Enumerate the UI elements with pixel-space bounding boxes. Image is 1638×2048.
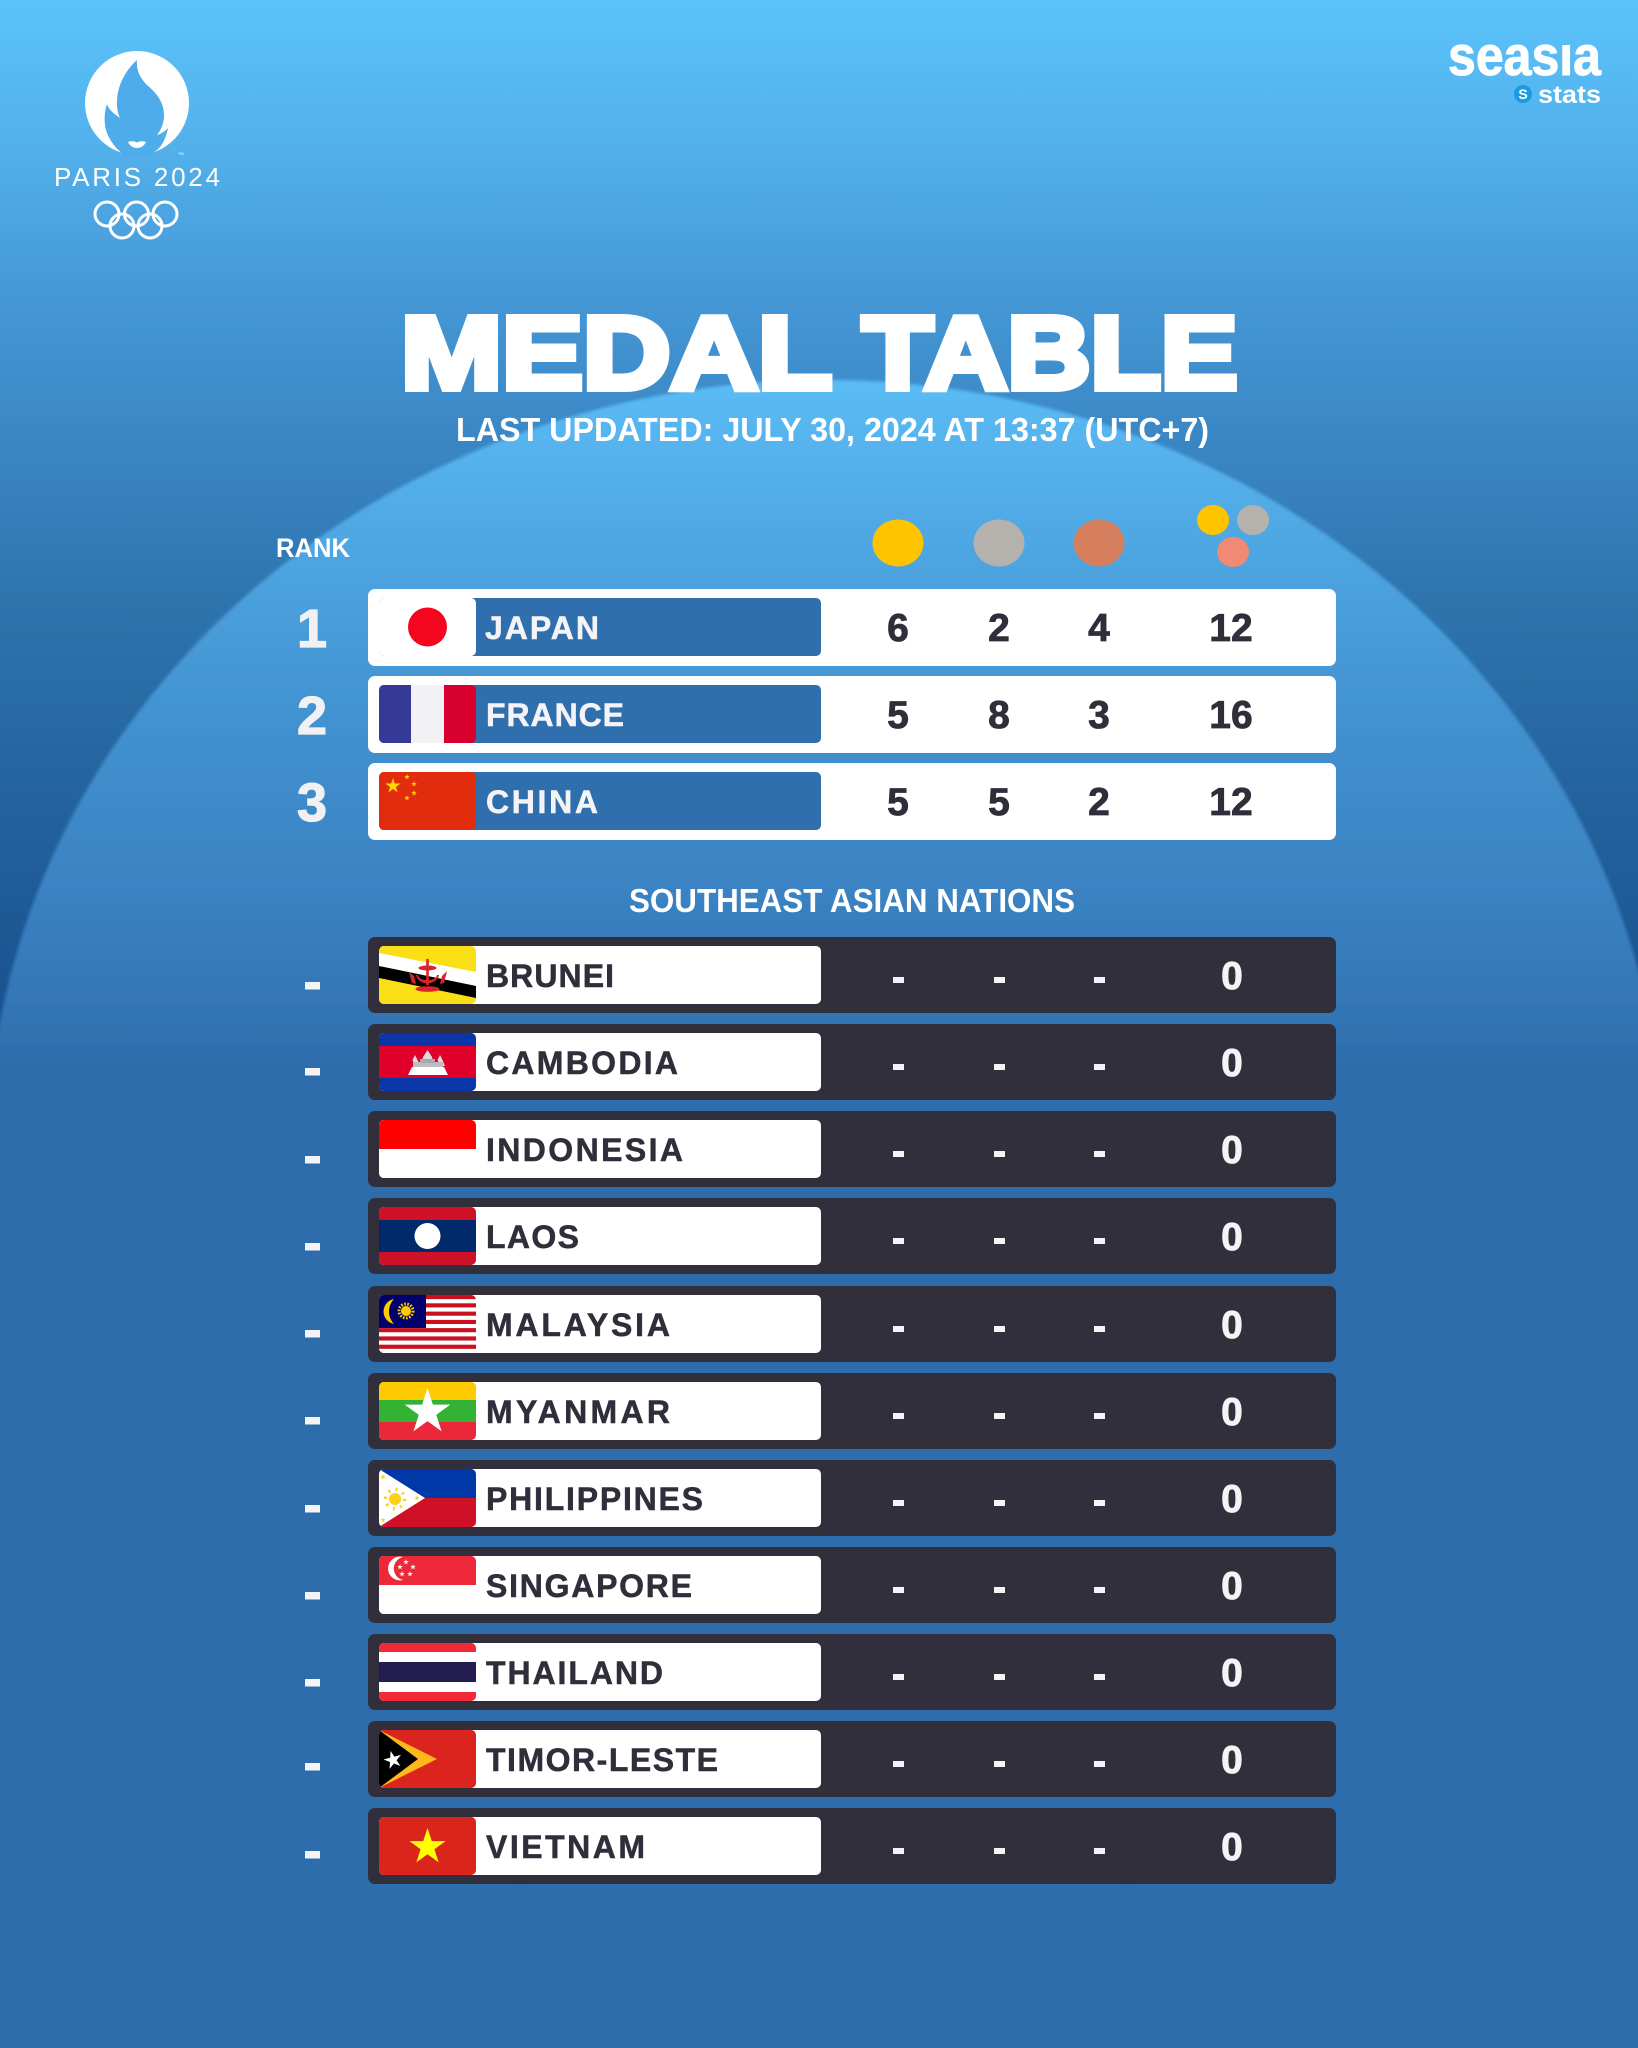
row: Thailand: THAILAND xyxy=(486,1655,663,1691)
logo: seasia stats: stats xyxy=(1538,81,1601,109)
row: China: CHINA xyxy=(486,784,598,820)
row: Myanmar: MYANMAR xyxy=(486,1394,670,1430)
row: France xyxy=(297,676,1336,753)
row: Brunei xyxy=(305,937,1336,1013)
row: Malaysia: 0 xyxy=(1221,1304,1243,1347)
row: Philippines xyxy=(305,1460,1336,1536)
icon: total medals xyxy=(1197,505,1269,567)
row: Singapore xyxy=(305,1547,1336,1623)
logo: seasia stats xyxy=(1449,44,1602,103)
row: France: 3 xyxy=(1088,694,1110,737)
row: Vietnam: 0 xyxy=(1221,1826,1243,1869)
row: Singapore: SINGAPORE xyxy=(486,1568,692,1604)
row: Cambodia: 0 xyxy=(1221,1042,1243,1085)
row: Japan: 4 xyxy=(1088,607,1110,650)
row: Singapore: 0 xyxy=(1221,1565,1243,1608)
logo: seasia stats: S xyxy=(1518,86,1528,102)
row: Vietnam xyxy=(305,1808,1336,1884)
icon: bronze medal xyxy=(1074,520,1124,566)
row: Malaysia xyxy=(305,1286,1336,1362)
row: Brunei: BRUNEI xyxy=(486,958,614,994)
icon: silver medal xyxy=(974,520,1024,566)
logo: Paris 2024: PARIS 2024 xyxy=(54,162,220,192)
row: Japan: 2 xyxy=(988,607,1010,650)
row: China xyxy=(297,763,1336,840)
row: Cambodia: CAMBODIA xyxy=(486,1045,678,1081)
header: rank: RANK xyxy=(276,533,350,563)
title xyxy=(401,296,1238,410)
row: Malaysia: MALAYSIA xyxy=(486,1307,670,1343)
row: Timor-Leste xyxy=(305,1721,1336,1797)
row: Timor-Leste: 0 xyxy=(1221,1739,1243,1782)
row: France: FRANCE xyxy=(486,697,624,733)
row: Laos: 0 xyxy=(1221,1216,1243,1259)
row: Thailand xyxy=(305,1634,1336,1710)
row: Indonesia: INDONESIA xyxy=(486,1132,683,1168)
row: Cambodia xyxy=(305,1024,1336,1100)
title: MEDAL xyxy=(401,296,832,410)
row: China: 5 xyxy=(988,781,1010,824)
logo: seasia stats: seasia xyxy=(1448,24,1602,87)
row: Japan: 6 xyxy=(887,607,909,650)
row: Indonesia: 0 xyxy=(1221,1129,1243,1172)
heading: Southeast Asian Nations: SOUTHEAST ASIAN NATIONS xyxy=(629,882,1075,919)
row: Vietnam: VIETNAM xyxy=(486,1829,645,1865)
row: Laos xyxy=(305,1198,1336,1274)
row: France: 2 xyxy=(297,686,327,746)
row: China: 3 xyxy=(297,773,327,833)
row: Philippines: 0 xyxy=(1221,1478,1243,1521)
row: Myanmar xyxy=(305,1373,1336,1449)
row: Timor-Leste: TIMOR-LESTE xyxy=(486,1742,718,1778)
row: Philippines: PHILIPPINES xyxy=(486,1481,703,1517)
row: Myanmar: 0 xyxy=(1221,1391,1243,1434)
title: TABLE xyxy=(862,296,1238,410)
row: Indonesia xyxy=(305,1111,1336,1187)
row: Brunei: 0 xyxy=(1221,955,1243,998)
icon: gold medal xyxy=(872,520,924,566)
row: Japan: JAPAN xyxy=(485,610,599,646)
logo: Paris 2024 xyxy=(54,51,220,238)
row: France: 8 xyxy=(988,694,1010,737)
row: China: 5 xyxy=(887,781,909,824)
row: Thailand: 0 xyxy=(1221,1652,1243,1695)
row: Japan: 12 xyxy=(1209,607,1253,650)
subtitle: LAST UPDATED: JULY 30, 2024 AT 13:37 (UTC+7) xyxy=(456,411,1209,448)
row: Japan xyxy=(297,589,1336,666)
row: France: 5 xyxy=(887,694,909,737)
row: France: 16 xyxy=(1209,694,1253,737)
row: China: 12 xyxy=(1209,781,1253,824)
row: China: 2 xyxy=(1088,781,1110,824)
row: Japan: 1 xyxy=(297,599,327,659)
row: Laos: LAOS xyxy=(486,1219,579,1255)
logo: Paris 2024: TM xyxy=(178,151,184,156)
